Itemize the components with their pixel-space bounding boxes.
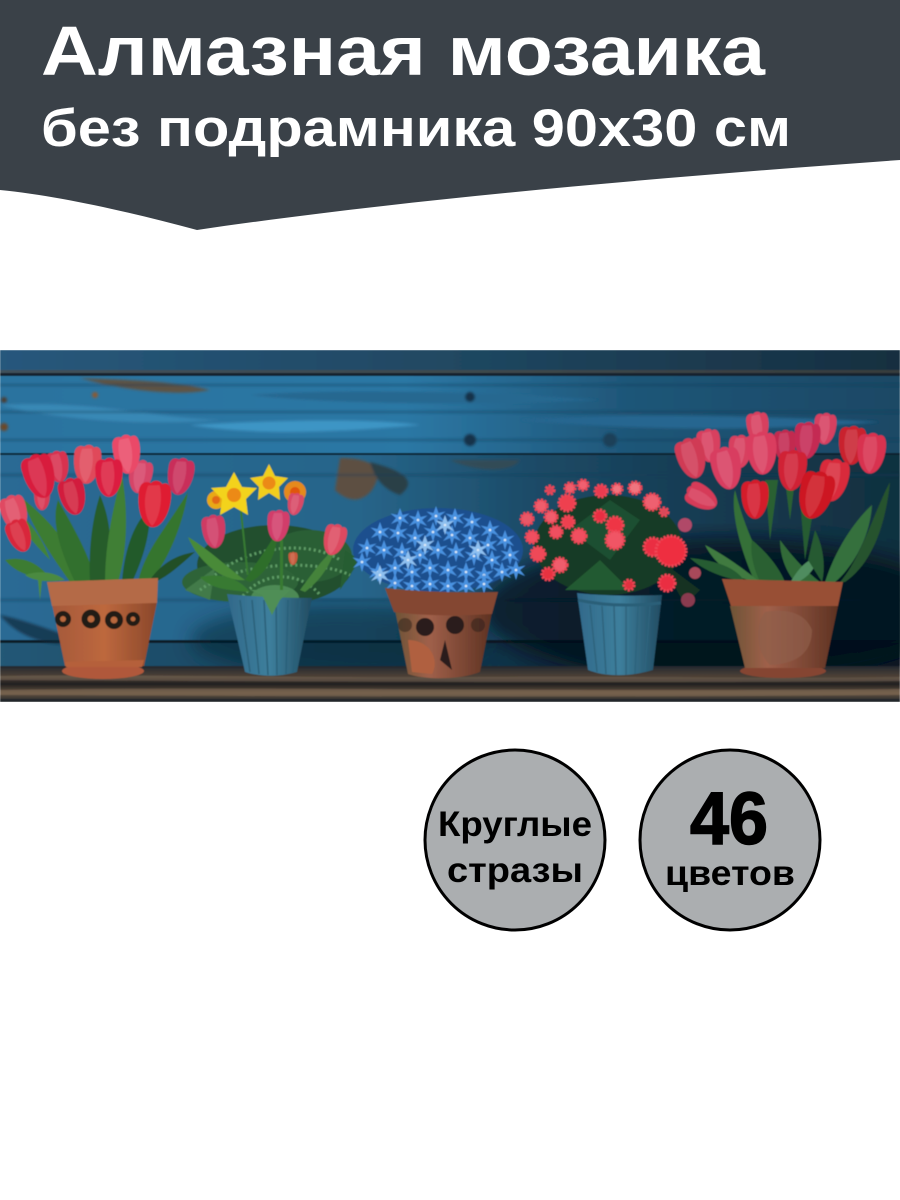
- terracotta pot: [52, 602, 157, 666]
- wooden wall: [0, 350, 900, 682]
- right tulip pot: [672, 411, 890, 678]
- leaves: [188, 510, 335, 592]
- badge: 46 colours: [640, 750, 820, 930]
- red blossoms: [521, 480, 686, 591]
- shadows behind pots: [480, 538, 900, 682]
- fern foliage: [182, 524, 358, 602]
- badge: round rhinestones: Круглые: [438, 805, 592, 844]
- badge: round rhinestones: стразы: [447, 851, 583, 890]
- left tulip pot: [0, 434, 196, 679]
- clay pot: [395, 610, 492, 678]
- blue ribbed pot: [227, 594, 312, 676]
- leaves: [690, 480, 890, 583]
- pot ornament: [55, 610, 140, 629]
- header banner: [0, 0, 900, 230]
- foliage: [534, 495, 700, 605]
- blue flower mound: [352, 506, 526, 596]
- blue flowers pot: [352, 506, 526, 678]
- tulip heads: [0, 434, 196, 555]
- badge: 46 colours: цветов: [665, 854, 795, 893]
- title: Алмазная мозаика: [41, 12, 766, 90]
- daffodil and fern pot: [182, 464, 360, 676]
- badge: 46 colours: 46: [690, 777, 768, 860]
- tulip heads: [672, 411, 887, 523]
- faded blossoms: [678, 518, 701, 607]
- daffodils: [207, 464, 306, 515]
- weathered terracotta pot: [740, 667, 826, 678]
- wooden shelf: [0, 666, 900, 702]
- leaves: [0, 475, 195, 600]
- blue ribbed pot: [577, 593, 662, 675]
- badge: round rhinestones: [425, 750, 605, 930]
- pot ornament: [398, 616, 485, 670]
- red flowers pot: [521, 480, 701, 675]
- subtitle: без подрамника 90х30 см: [41, 99, 791, 158]
- photo: flower pots on blue wooden wall: [0, 350, 900, 702]
- small tulips: [201, 491, 349, 565]
